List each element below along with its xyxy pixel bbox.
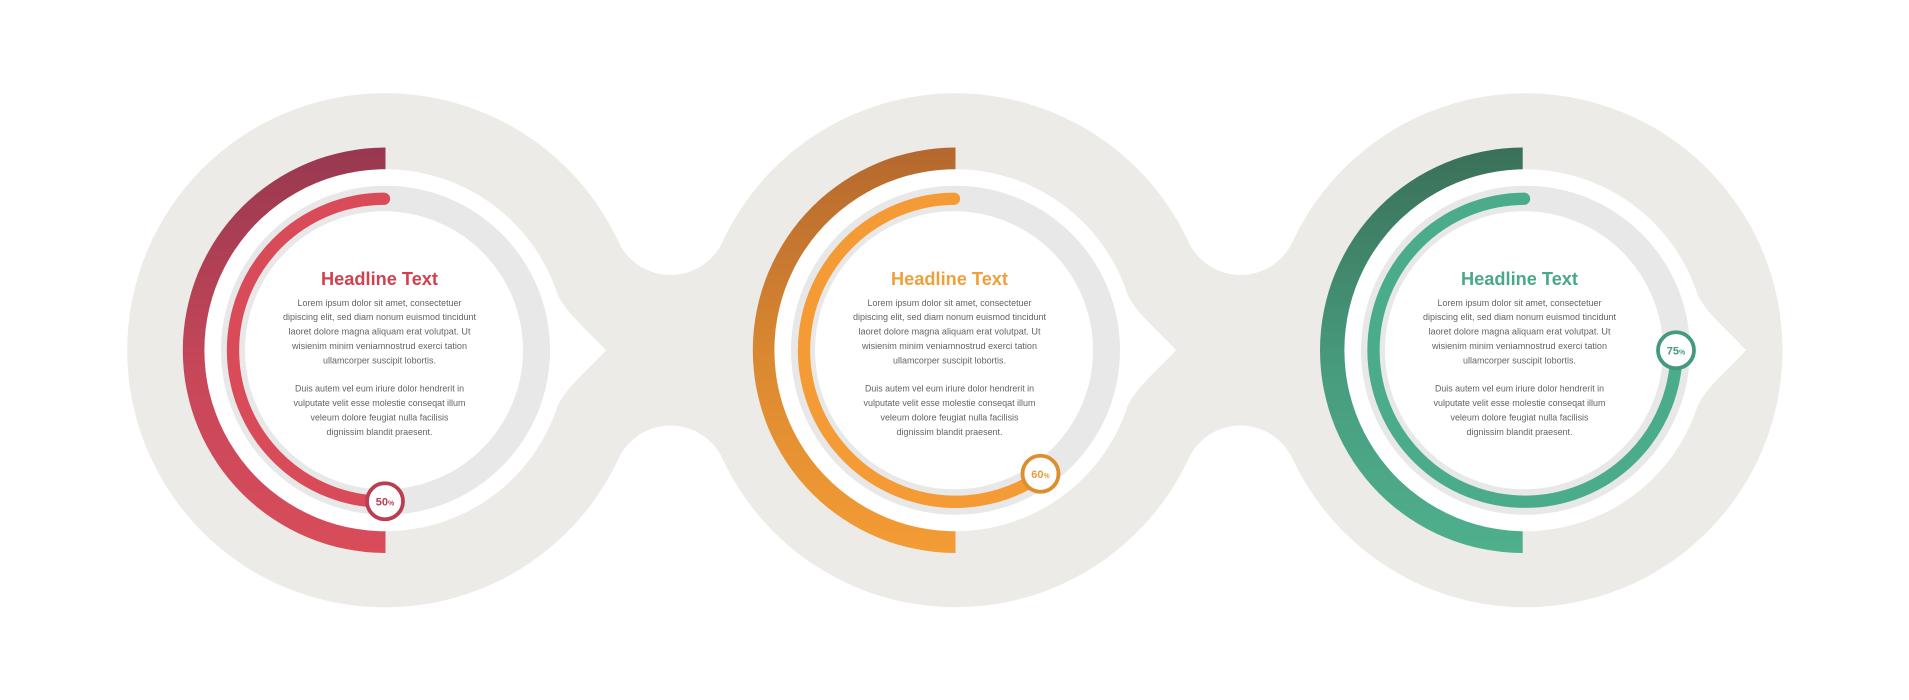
white teardrop disc — [1344, 169, 1746, 531]
grey track ring — [1361, 186, 1690, 515]
body text: dignissim blandit praesent. — [896, 427, 1002, 438]
background connected circles shape — [128, 93, 1783, 607]
heading: Headline Text — [1461, 269, 1578, 289]
progress arc green — [1374, 199, 1676, 502]
body text: vulputate velit esse molestie conseqat illum — [294, 398, 466, 409]
progress badge 60% — [1022, 456, 1058, 492]
body text: laoret dolore magna aliquam erat volutpat. Ut — [1428, 327, 1611, 338]
body text: laoret dolore magna aliquam erat volutpat. Ut — [858, 327, 1041, 338]
grey track ring — [221, 186, 550, 515]
grey track ring — [791, 186, 1120, 515]
body text: Duis autem vel eum iriure dolor hendrerit in — [1435, 384, 1604, 395]
panel: step 3 green 75% — [1320, 148, 1746, 553]
inner white disc — [1385, 211, 1663, 489]
left edge of background circle — [127, 93, 641, 607]
body text: dipiscing elit, sed diam nonum euismod tincidunt — [283, 312, 476, 323]
body text: veleum dolore feugiat nulla facilisis — [310, 412, 449, 423]
body text — [1423, 298, 1616, 438]
body text: veleum dolore feugiat nulla facilisis — [880, 412, 1019, 423]
body text: dipiscing elit, sed diam nonum euismod tincidunt — [1423, 312, 1616, 323]
panel: step 1 red 50% — [183, 148, 606, 553]
progress badge 75% — [1658, 332, 1694, 368]
progress badge 50%: 50% — [376, 496, 395, 508]
panel: step 2 orange 60% — [753, 148, 1176, 553]
white teardrop disc — [204, 169, 606, 531]
body text: laoret dolore magna aliquam erat volutpat. Ut — [288, 327, 471, 338]
body text: Lorem ipsum dolor sit amet, consectetuer — [868, 298, 1032, 309]
body text: Duis autem vel eum iriure dolor hendrerit in — [295, 384, 464, 395]
body text: ullamcorper suscipit lobortis. — [893, 355, 1006, 366]
body text: Duis autem vel eum iriure dolor hendrerit in — [865, 384, 1034, 395]
body text: Lorem ipsum dolor sit amet, consectetuer — [298, 298, 462, 309]
outer half ring red — [183, 148, 386, 553]
inner white disc — [245, 211, 523, 489]
body text: dignissim blandit praesent. — [326, 427, 432, 438]
body text: ullamcorper suscipit lobortis. — [323, 355, 436, 366]
inner white disc — [815, 211, 1093, 489]
progress badge 60%: 60% — [1031, 469, 1051, 481]
body text: wisienim minim veniamnostrud exerci tation — [1431, 341, 1607, 352]
body text: wisienim minim veniamnostrud exerci tation — [291, 341, 467, 352]
body text: dipiscing elit, sed diam nonum euismod tincidunt — [853, 312, 1046, 323]
body text — [283, 298, 476, 438]
body text: ullamcorper suscipit lobortis. — [1463, 355, 1576, 366]
progress badge 50% — [367, 483, 403, 519]
outer half ring green — [1320, 148, 1523, 553]
heading: Headline Text — [891, 269, 1008, 289]
body text — [853, 298, 1046, 438]
body text: veleum dolore feugiat nulla facilisis — [1450, 412, 1589, 423]
body text: dignissim blandit praesent. — [1466, 427, 1572, 438]
heading: Headline Text — [321, 269, 438, 289]
progress arc orange — [804, 199, 1040, 502]
outer half ring orange — [753, 148, 956, 553]
progress badge 75%: 75% — [1667, 345, 1686, 357]
body text: vulputate velit esse molestie conseqat illum — [864, 398, 1036, 409]
body text: wisienim minim veniamnostrud exerci tation — [861, 341, 1037, 352]
body text: Lorem ipsum dolor sit amet, consectetuer — [1438, 298, 1602, 309]
body text: vulputate velit esse molestie conseqat illum — [1434, 398, 1606, 409]
progress arc red — [233, 199, 385, 502]
white teardrop disc — [774, 169, 1176, 531]
